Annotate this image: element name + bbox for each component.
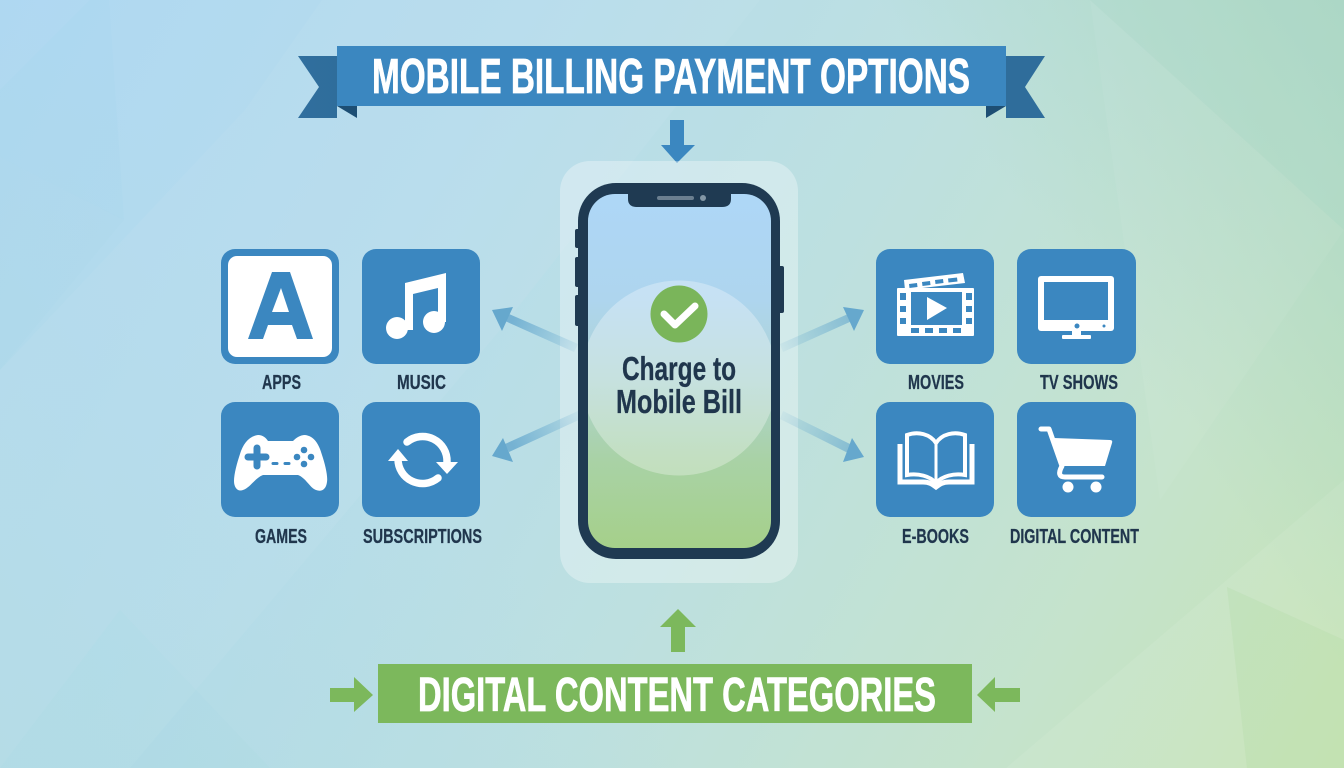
phone halo — [560, 161, 798, 583]
icon: open book — [900, 433, 972, 487]
speaker and camera — [657, 195, 706, 201]
tile: e-books — [876, 402, 994, 517]
label: games: GAMES — [255, 526, 307, 548]
arrow: phone to movies — [780, 307, 864, 352]
label: tv shows: TV SHOWS — [1040, 372, 1118, 394]
categories banner — [378, 664, 972, 723]
translucent circle — [582, 280, 776, 476]
tile: movies — [876, 249, 994, 364]
smartphone — [575, 183, 784, 559]
notch — [628, 192, 731, 207]
label: subscriptions: SUBSCRIPTIONS — [363, 526, 482, 548]
phone text: Mobile Bill — [616, 383, 742, 420]
title text: MOBILE BILLING PAYMENT OPTIONS — [372, 50, 970, 104]
tile: music — [362, 249, 480, 364]
tile: games — [221, 402, 339, 517]
icon: game controller — [234, 435, 327, 491]
arrow: phone to music — [492, 307, 578, 352]
arrow: left into banner — [330, 677, 373, 712]
icon: music note — [386, 273, 446, 339]
label: apps: APPS — [262, 372, 301, 394]
icon: letter A — [248, 272, 313, 339]
arrow: categories up to phone — [660, 609, 696, 652]
arrow: phone to e-books — [780, 411, 864, 462]
tile: apps — [221, 249, 339, 364]
tile: subscriptions — [362, 402, 480, 517]
tile: digital content — [1017, 402, 1136, 517]
arrow: ribbon down to phone — [661, 120, 695, 163]
check badge — [650, 286, 708, 342]
phone screen — [588, 194, 771, 548]
icon: sync arrows — [388, 436, 458, 484]
title ribbon — [298, 46, 1045, 118]
icon: film and clapper — [897, 273, 974, 336]
label: e-books: E-BOOKS — [902, 526, 969, 548]
phone text: Charge to — [622, 350, 736, 387]
label: music: MUSIC — [397, 372, 446, 394]
phone text — [616, 350, 742, 420]
arrow: phone to subscriptions — [492, 411, 581, 462]
icon: monitor — [1038, 276, 1114, 339]
categories text: DIGITAL CONTENT CATEGORIES — [418, 669, 936, 722]
tile: tv shows — [1017, 249, 1136, 364]
label: movies: MOVIES — [908, 372, 964, 394]
arrow: right into banner — [977, 677, 1020, 712]
icon: shopping cart — [1041, 429, 1112, 492]
label: digital content: DIGITAL CONTENT — [1010, 526, 1139, 548]
